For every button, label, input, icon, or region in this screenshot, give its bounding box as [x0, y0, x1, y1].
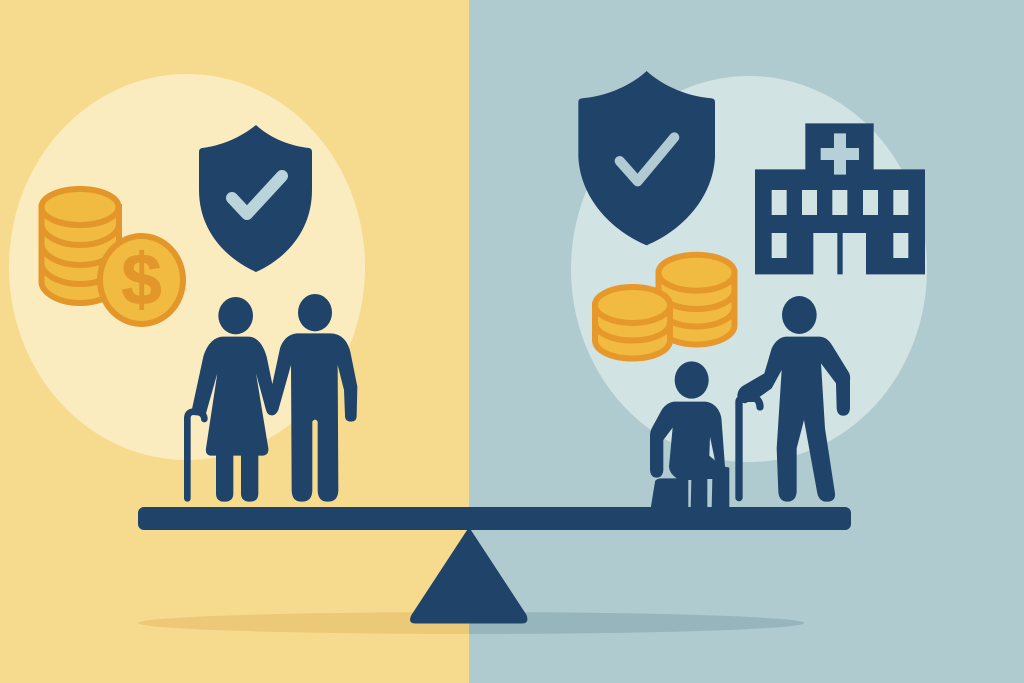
panel: right blue background — [469, 0, 1024, 683]
seesaw beam — [138, 507, 851, 530]
icon: left shield with check — [199, 125, 312, 272]
hospital windows — [772, 190, 908, 258]
icon: right shield with check — [578, 71, 715, 245]
icon: right front coin stack — [595, 287, 670, 358]
figure: woman — [187, 297, 277, 502]
seesaw fulcrum triangle — [411, 528, 527, 623]
right pale circle — [571, 76, 927, 462]
left couple figures — [187, 294, 357, 502]
icon: dollar coin: $ — [121, 240, 162, 320]
icon: left coin stack — [42, 189, 119, 303]
icon: hospital building — [755, 123, 925, 274]
hospital cross — [821, 133, 859, 175]
panel: left yellow background — [0, 0, 469, 683]
ground shadow — [138, 612, 804, 634]
icon: right back coin stack — [658, 255, 734, 344]
figure: man — [270, 294, 357, 502]
left pale circle — [9, 74, 365, 460]
icon: dollar coin — [100, 236, 183, 324]
figure: seated person — [650, 361, 729, 508]
right figures — [650, 296, 850, 508]
figure: standing person with cane — [737, 296, 850, 502]
